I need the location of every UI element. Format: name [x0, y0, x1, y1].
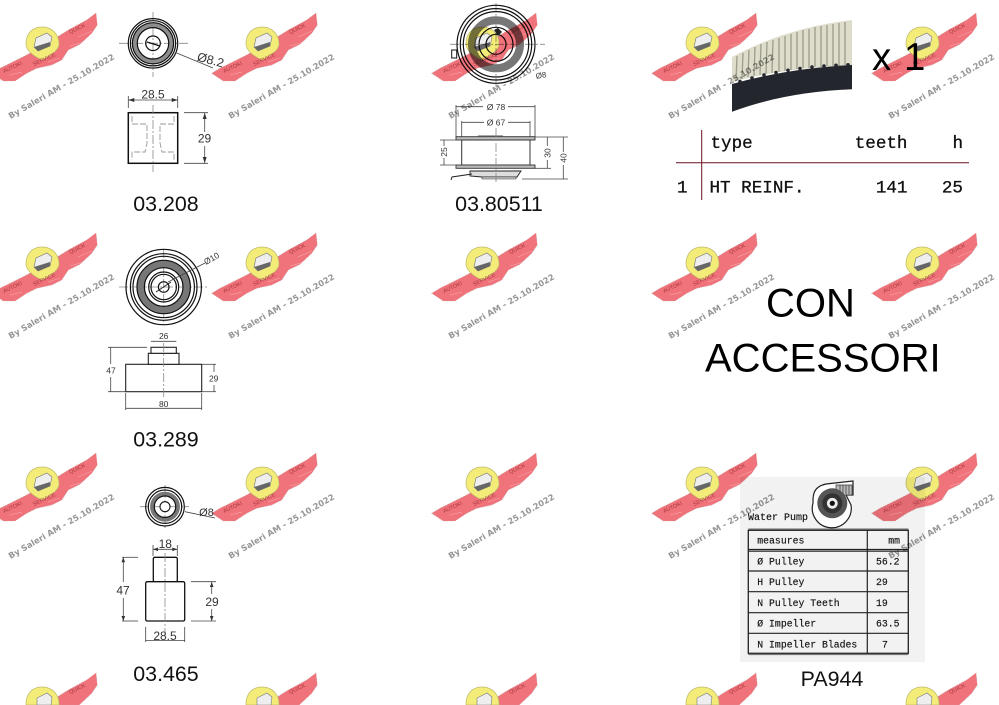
part drawing: roller 03.465: 47: [116, 584, 130, 598]
watermark layer: By Saleri AM - 25.10.2022: [666, 492, 776, 561]
measures table: 56.2: [876, 556, 900, 568]
part drawing: roller 03.208: Ø8.2: [196, 50, 225, 70]
part drawing: roller 03.465: 28.5: [153, 629, 177, 643]
measures table: 7: [882, 640, 888, 650]
part label: 03.208: 03.208: [133, 192, 199, 216]
part drawing: roller 03.208: 28.5: [141, 88, 165, 102]
measures table: 63.5: [876, 619, 900, 630]
belt specification table: type: [710, 134, 753, 154]
part drawing: idler 03.289: [106, 249, 221, 410]
measures table: 29: [876, 577, 888, 588]
measures table: H Pulley: [757, 577, 804, 588]
belt specification table: 25: [942, 178, 963, 198]
watermark layer: By Saleri AM - 25.10.2022: [446, 492, 556, 561]
part drawing: roller 03.208: [119, 12, 225, 172]
part drawing: tensioner 03.80511: 40: [558, 153, 568, 163]
part drawing: idler 03.289: 47: [106, 366, 116, 376]
measures table: Ø Pulley: [757, 556, 804, 568]
part drawing: roller 03.465: [116, 485, 219, 643]
part drawing: tensioner 03.80511: 30: [542, 148, 552, 158]
watermark layer: By Saleri AM - 25.10.2022: [886, 272, 996, 341]
measures table: Ø Impeller: [757, 619, 816, 630]
measures table: measures: [757, 536, 804, 546]
part drawing: tensioner 03.80511: Ø 67: [487, 118, 505, 128]
note: con accessori: [705, 282, 941, 380]
note: con accessori: CON: [766, 282, 855, 326]
part drawing: tensioner 03.80511: 25: [439, 147, 449, 157]
watermark layer: By Saleri AM - 25.10.2022: [446, 52, 556, 121]
belt specification table: teeth: [855, 134, 908, 154]
part drawing: idler 03.289: 29: [209, 374, 219, 384]
watermark layer: By Saleri AM - 25.10.2022: [6, 272, 116, 341]
measures table: 19: [876, 598, 888, 609]
part label: 03.465: 03.465: [133, 662, 199, 686]
watermark layer: By Saleri AM - 25.10.2022: [226, 492, 336, 561]
part drawing: idler 03.289: 26: [159, 331, 169, 341]
watermark layer: By Saleri AM - 25.10.2022: [6, 492, 116, 561]
part drawing: roller 03.208: 29: [198, 132, 211, 146]
watermark layer: By Saleri AM - 25.10.2022: [6, 52, 116, 121]
icon: water pump: [812, 481, 853, 528]
part label: PA944: PA944: [801, 667, 863, 691]
part drawing: idler 03.289: Ø10: [202, 250, 221, 267]
quantity: x 1: 1: [904, 36, 925, 79]
belt specification table: HT REINF.: [710, 178, 805, 198]
watermark layer: By Saleri AM - 25.10.2022: [666, 52, 776, 121]
part drawing: roller 03.465: 29: [205, 595, 219, 609]
quantity: x 1: x: [872, 36, 891, 79]
part drawing: idler 03.289: 80: [159, 399, 169, 409]
watermark layer: By Saleri AM - 25.10.2022: [666, 272, 776, 341]
measures table: N Pulley Teeth: [757, 598, 840, 609]
part label: 03.80511: 03.80511: [455, 192, 543, 216]
belt specification table: h: [952, 134, 963, 154]
watermark layer: By Saleri AM - 25.10.2022: [886, 52, 996, 121]
note: con accessori: ACCESSORI: [705, 336, 941, 380]
measures table: N Impeller Blades: [757, 640, 857, 650]
belt specification table: 1: [677, 178, 688, 198]
timing belt photo: [732, 20, 852, 112]
watermark layer: By Saleri AM - 25.10.2022: [886, 492, 996, 561]
part drawing: tensioner 03.80511: Ø8: [535, 70, 548, 81]
part drawing: roller 03.465: Ø8: [199, 507, 214, 519]
part drawing: tensioner 03.80511: Ø 78: [487, 102, 505, 112]
part drawing: tensioner 03.80511: [439, 3, 568, 182]
part drawing: roller 03.465: 18: [159, 537, 172, 551]
panel: water pump specification: Water Pump: [748, 513, 808, 524]
watermark layer: By Saleri AM - 25.10.2022: [226, 52, 336, 121]
measures table: mm: [888, 536, 900, 546]
belt specification table: [676, 130, 969, 200]
belt specification table: 141: [876, 178, 908, 198]
watermark layer: By Saleri AM - 25.10.2022: [446, 272, 556, 341]
part label: 03.289: 03.289: [133, 428, 199, 452]
measures table: [748, 529, 908, 654]
watermark layer: By Saleri AM - 25.10.2022: [226, 272, 336, 341]
panel: water pump specification: [740, 477, 925, 662]
